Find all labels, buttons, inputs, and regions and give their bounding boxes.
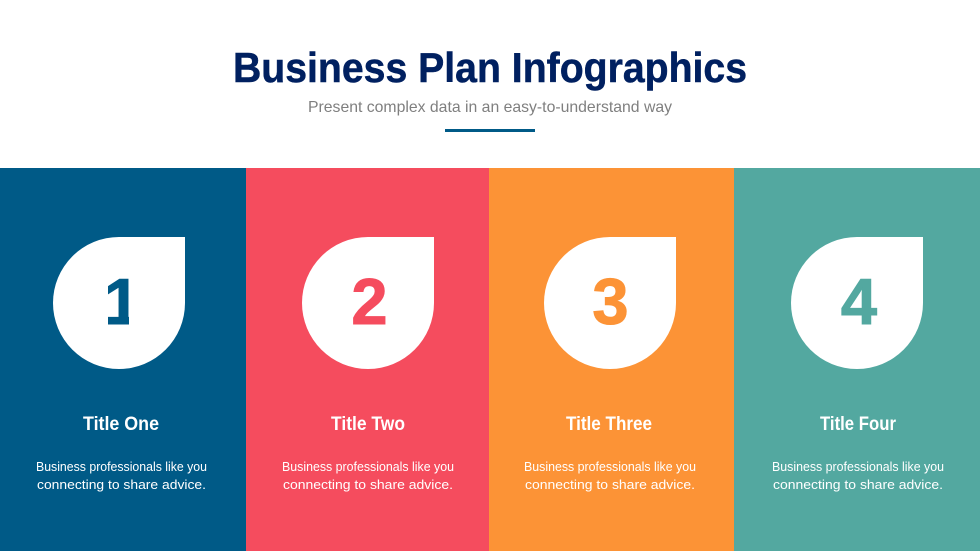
description: connecting to share advice. xyxy=(283,477,453,492)
number 2: 2 xyxy=(351,265,388,338)
panel: step one xyxy=(0,168,246,551)
panel: step two xyxy=(246,168,489,551)
icon: teardrop badge 1 xyxy=(53,237,185,369)
title: Business Plan Infographics xyxy=(233,44,747,91)
number 3: 3 xyxy=(592,265,629,338)
heading: Title Three: Title Three xyxy=(566,414,652,435)
description: Business professionals like you xyxy=(36,459,207,474)
description: connecting to share advice. xyxy=(525,477,695,492)
description: Business professionals like you xyxy=(524,459,696,474)
header xyxy=(233,44,747,132)
description: Business professionals like you xyxy=(772,459,944,474)
heading: Title Two: Title Two xyxy=(331,414,405,435)
number 1: 1 xyxy=(104,265,140,338)
description: Business professionals like you xyxy=(282,459,454,474)
subtitle: Present complex data in an easy-to-understand way xyxy=(308,99,672,116)
icon: teardrop badge 2 xyxy=(302,237,434,369)
accent rule xyxy=(445,129,535,132)
description: connecting to share advice. xyxy=(37,477,206,492)
heading: Title One: Title One xyxy=(83,414,159,435)
icon: teardrop badge 3 xyxy=(544,237,676,369)
icon: teardrop badge 4 xyxy=(791,237,923,369)
description: connecting to share advice. xyxy=(773,477,943,492)
number 4: 4 xyxy=(841,265,877,338)
panel: step three xyxy=(489,168,734,551)
panel: step four xyxy=(734,168,980,551)
heading: Title Four: Title Four xyxy=(820,414,897,435)
